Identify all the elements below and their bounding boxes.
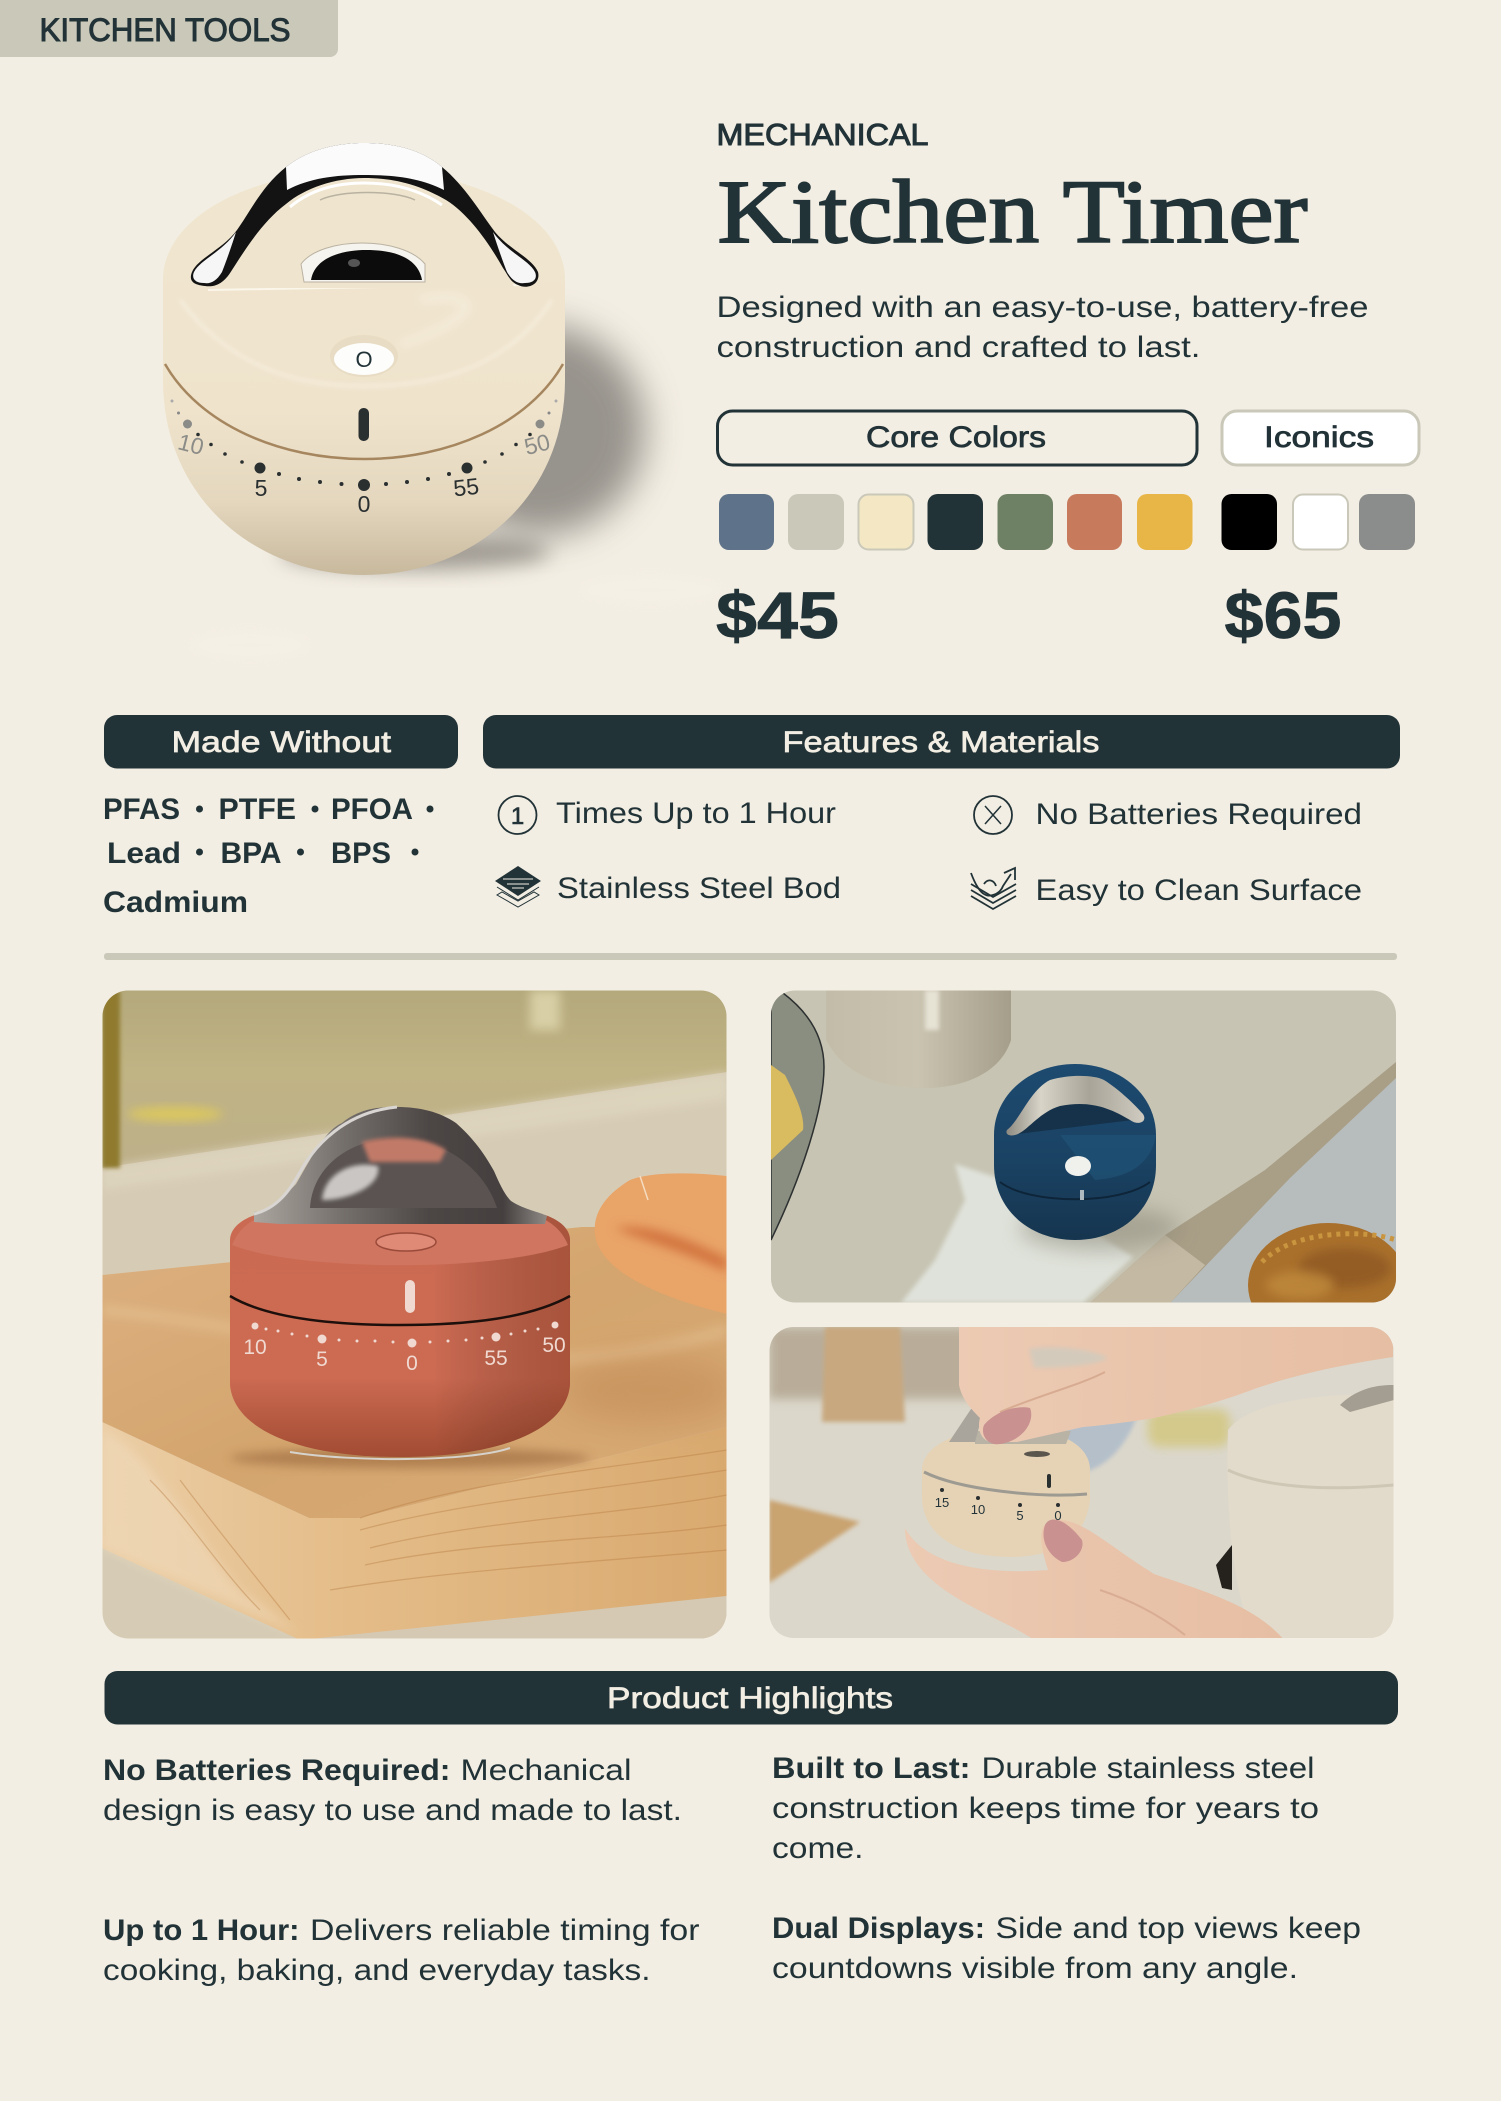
product description: Designed with an easy-to-use, battery-free: [716, 291, 1368, 324]
cream pot: [1228, 1385, 1394, 1546]
highlight: built to last: Built to Last:: [772, 1752, 970, 1785]
icon: numbered circle: 1: [511, 803, 524, 830]
made without list: Lead: [107, 837, 181, 870]
dial scale: 55: [452, 473, 480, 501]
icon: crossed circle: [974, 796, 1012, 834]
highlight: up to 1 hour: [103, 1914, 700, 1987]
dial scale: [243, 1280, 566, 1375]
chrome handle: [191, 143, 538, 288]
made without list: BPA: [220, 837, 282, 870]
feature: easy to clean surface: Easy to Clean Surface: [1036, 874, 1362, 907]
highlight: built to last: come.: [772, 1832, 864, 1865]
lower hand: [905, 1520, 1284, 1640]
product description: construction and crafted to last.: [716, 331, 1200, 364]
push button: O: [355, 347, 373, 372]
colour swatches: core colors: [719, 494, 1192, 550]
highlight: no batteries required: [103, 1754, 682, 1827]
blue bowl: [1066, 1421, 1137, 1472]
yellow glass: [1148, 1409, 1230, 1447]
pointer mark: [358, 408, 369, 441]
label: Iconics: [1222, 411, 1419, 465]
dial scale: 5: [316, 1348, 328, 1371]
feature: times up to 1 hour: Times Up to 1 Hour: [556, 797, 836, 830]
colour swatches: iconics: [1222, 494, 1415, 550]
feature: stainless steel body: Stainless Steel Bod: [557, 872, 841, 905]
feature: easy to clean surface: [971, 868, 1362, 909]
dial scale: 50: [542, 1334, 566, 1357]
photo: navy timer on counter: [771, 990, 1396, 1302]
label: Core Colors: [718, 411, 1197, 465]
highlight: no batteries required: design is easy to use and made to last.: [103, 1794, 682, 1827]
title: Kitchen Timer: Kitchen Timer: [718, 163, 1308, 262]
category tag: Kitchen Tools: KITCHEN TOOLS: [40, 12, 290, 48]
product description: [716, 291, 1368, 364]
linen cloth: [1090, 1062, 1396, 1303]
product image: cream mechanical timer: [163, 143, 720, 659]
highlight: dual displays: Dual Displays:: [772, 1912, 985, 1945]
photo: hands setting cream timer: [769, 1327, 1400, 1640]
dial scale: 55: [484, 1347, 508, 1370]
price: core colors: $45: [716, 578, 839, 652]
highlight: dual displays: [772, 1912, 1361, 1985]
highlight: up to 1 hour: cooking, baking, and everyday tasks.: [103, 1954, 650, 1987]
made without list: BPS: [331, 837, 391, 870]
glass bowl with grains: [771, 993, 824, 1240]
category tag: Kitchen Tools: [0, 0, 338, 57]
dial scale: 10: [243, 1336, 267, 1359]
navy timer: [994, 1064, 1156, 1240]
made without list: [103, 793, 434, 919]
dial scale: [170, 400, 558, 517]
label: Iconics: Iconics: [1264, 421, 1374, 454]
feature: stainless steel body: [495, 866, 841, 907]
feature: no batteries required: [974, 796, 1362, 834]
dial scale: 5: [255, 475, 267, 501]
upper hand: [959, 1327, 1393, 1444]
tray: [1170, 1062, 1396, 1303]
highlight: dual displays: Side and top views keep: [996, 1912, 1361, 1945]
canister: [826, 990, 1011, 1088]
pepper mill: [822, 1327, 905, 1422]
highlight: dual displays: countdowns visible from any angle.: [772, 1952, 1298, 1985]
cream timer: 15: [935, 1495, 949, 1510]
feature: no batteries required: No Batteries Required: [1036, 798, 1362, 831]
made without list: PTFE: [218, 793, 296, 826]
made without list: Cadmium: [103, 886, 248, 919]
header bar: Product Highlights: Product Highlights: [607, 1682, 893, 1715]
highlight: built to last: construction keeps time for years to: [772, 1792, 1319, 1825]
photo: terracotta timer on cutting board: [102, 990, 740, 1640]
white paper reflection: [901, 1164, 1133, 1303]
dial scale: 0: [358, 491, 370, 517]
timer body: [230, 1210, 570, 1459]
dial scale: 0: [406, 1352, 418, 1375]
icon: numbered circle: [498, 796, 536, 834]
made without list: PFAS: [103, 793, 180, 826]
made without list: PFOA: [331, 793, 413, 826]
sugar cookie: [1248, 1223, 1396, 1302]
cream timer: 0: [1054, 1508, 1062, 1523]
dial scale: 10: [175, 429, 206, 460]
subtitle: Mechanical: MECHANICAL: [716, 117, 928, 152]
highlight: up to 1 hour: Up to 1 Hour:: [103, 1914, 300, 1947]
cream timer: 10: [971, 1502, 985, 1517]
timer window: [301, 243, 425, 282]
fingernail: [1044, 1520, 1083, 1562]
chrome dome handle: [254, 1107, 547, 1224]
fingernail: [983, 1407, 1031, 1444]
header bar: Features & Materials: [483, 715, 1400, 768]
dial scale: 50: [522, 429, 553, 460]
dark gap: [1216, 1545, 1232, 1590]
cream timer: [922, 1409, 1090, 1557]
orange towel: [595, 1173, 727, 1314]
header bar: Made Without: [104, 715, 458, 768]
highlight: built to last: [772, 1752, 1319, 1865]
highlight: no batteries required: Mechanical: [460, 1754, 632, 1787]
push button: [330, 335, 398, 377]
icon: stacked layers: [495, 866, 541, 907]
highlight: up to 1 hour: Delivers reliable timing for: [310, 1914, 700, 1947]
icon: layers with arrow: [971, 868, 1016, 909]
cream timer: 5: [1016, 1508, 1024, 1523]
highlight: built to last: Durable stainless steel: [982, 1752, 1314, 1785]
header bar: Made Without: Made Without: [172, 726, 392, 759]
label: Core Colors: Core Colors: [866, 421, 1046, 454]
price: iconics: $65: [1224, 578, 1342, 652]
feature: times up to 1 hour: [498, 796, 836, 834]
header bar: Features & Materials: Features & Materials: [782, 726, 1100, 759]
wooden board: [769, 1500, 860, 1583]
header bar: Product Highlights: [104, 1671, 1398, 1724]
highlight: no batteries required: No Batteries Required:: [103, 1754, 450, 1787]
